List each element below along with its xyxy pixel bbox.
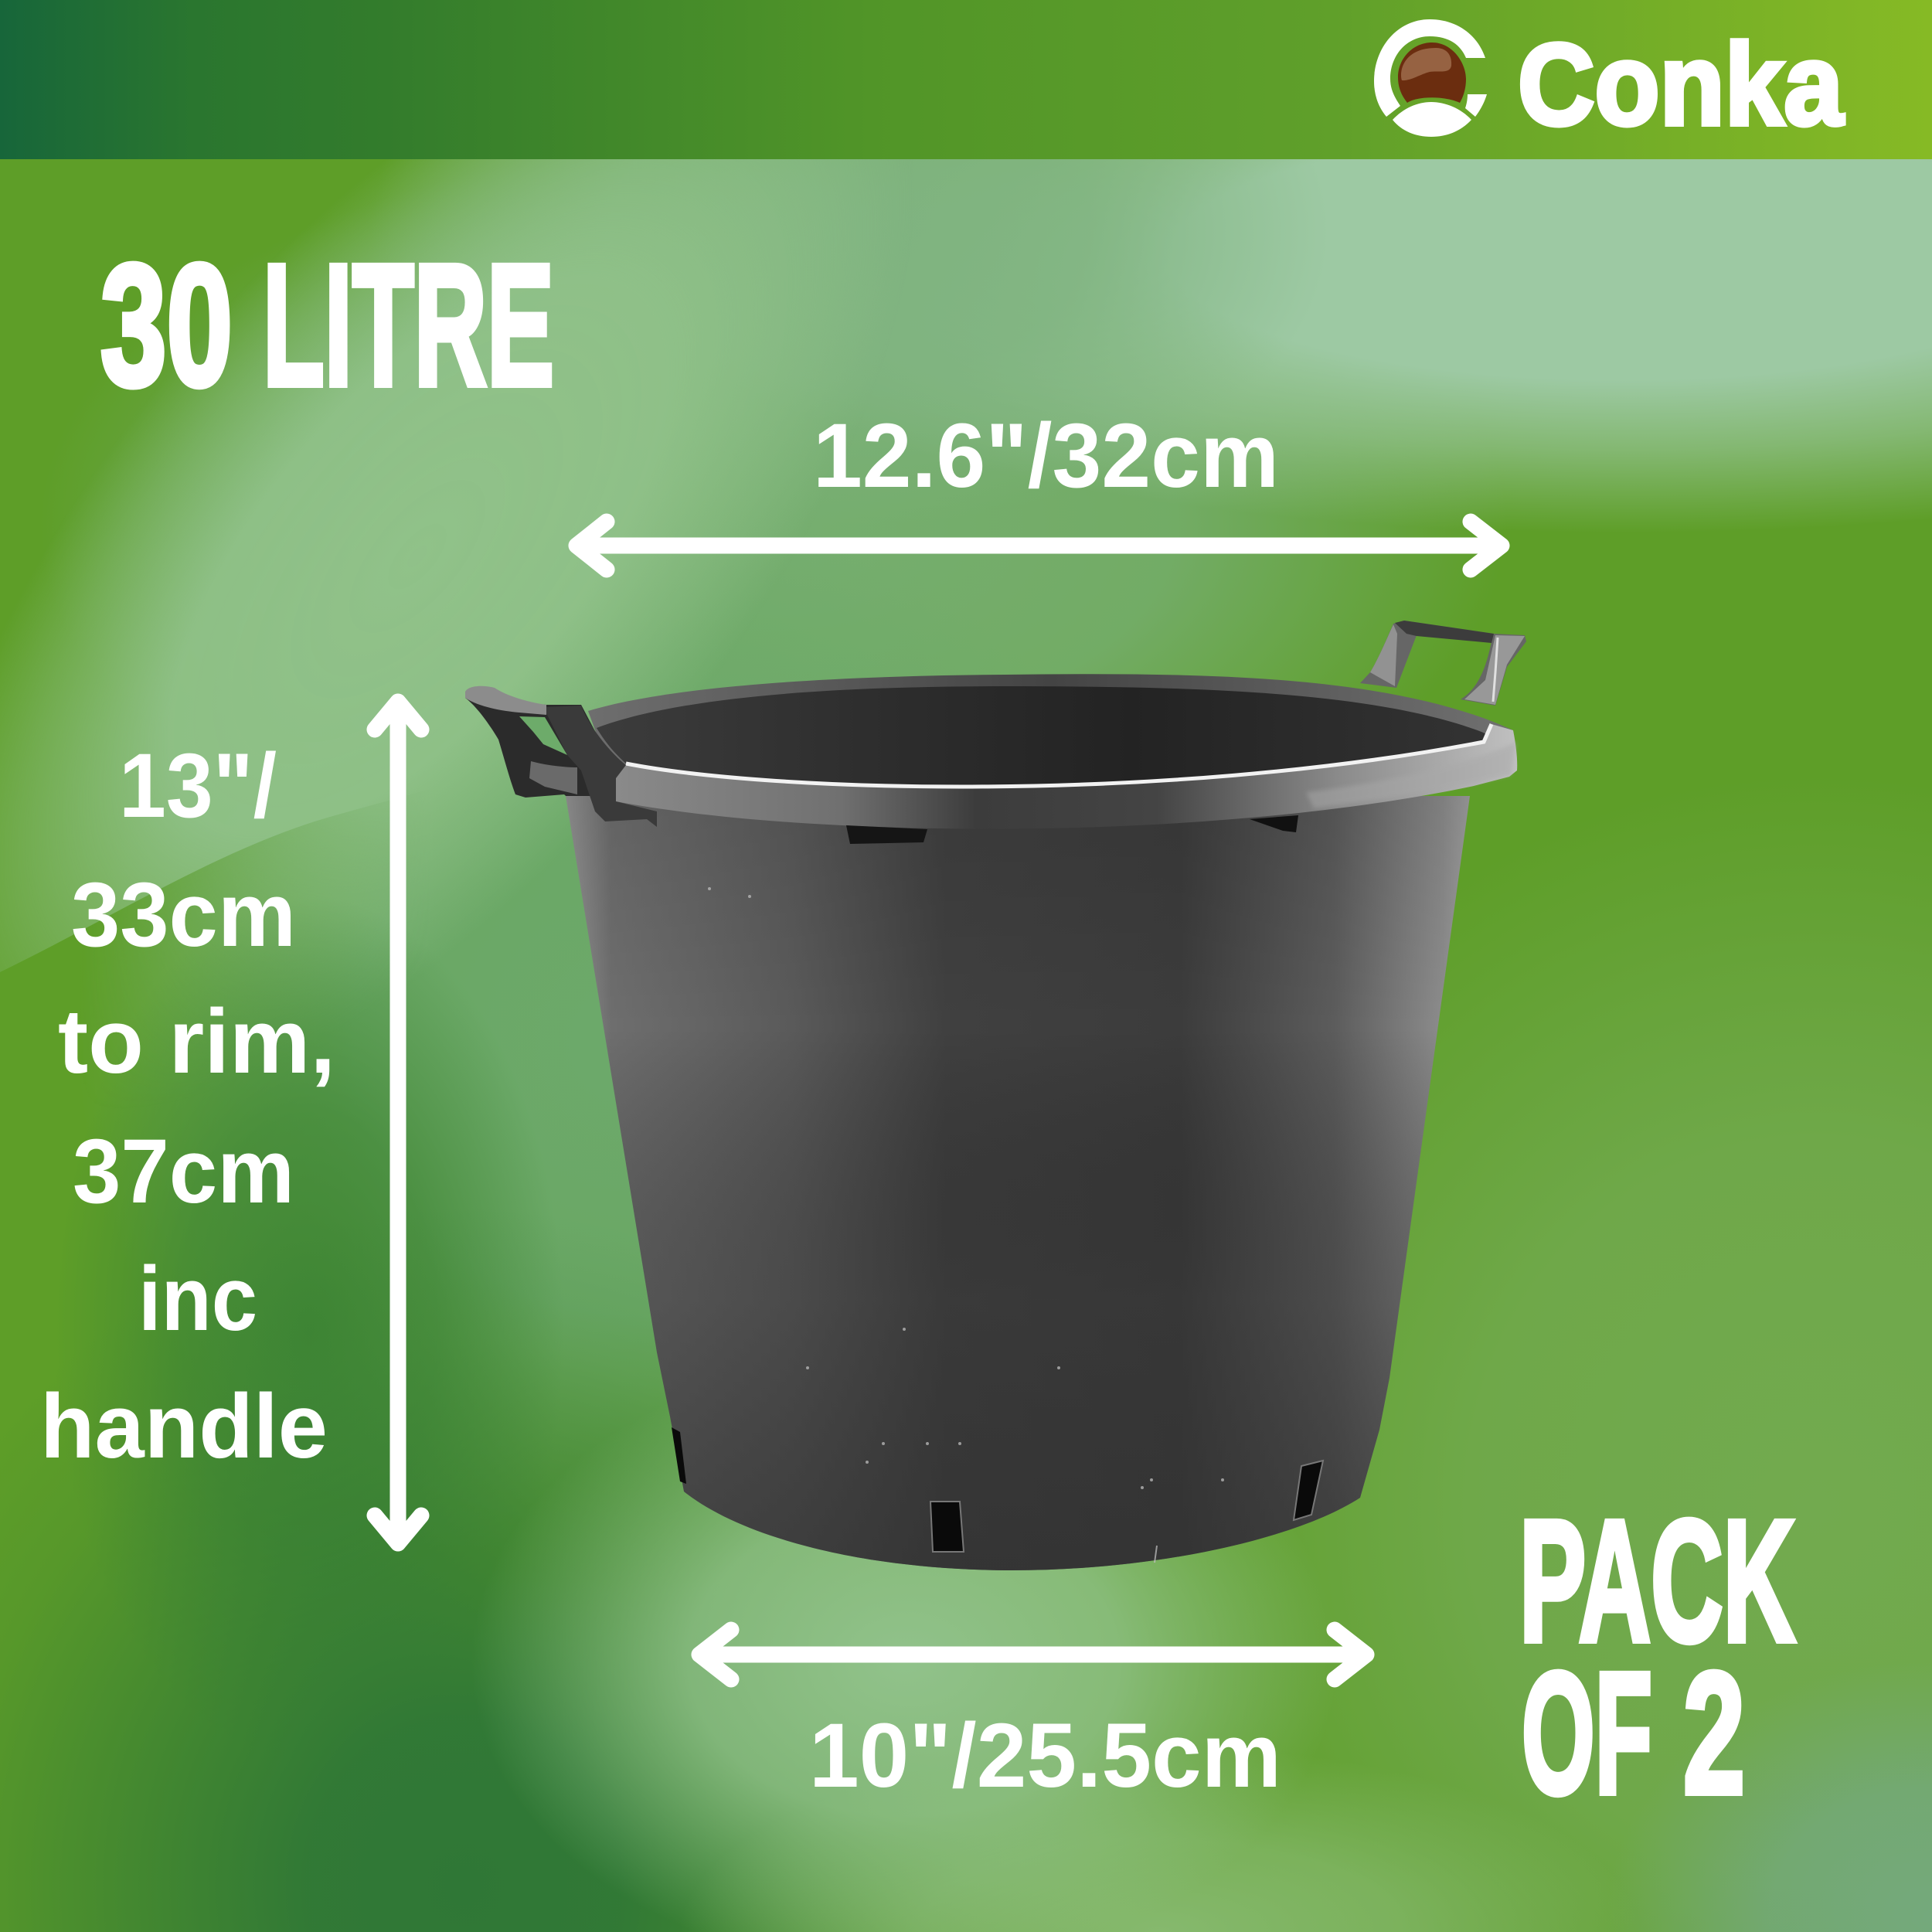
logo wordmark: Conka xyxy=(1518,19,1844,149)
surface specks xyxy=(708,887,1224,1563)
label: height: inc xyxy=(138,1248,257,1350)
label: pack of 2 xyxy=(1519,1485,1795,1830)
logo icon xyxy=(1374,19,1487,137)
arrow: base width xyxy=(699,1630,1366,1679)
label: height: to rim, xyxy=(58,991,335,1093)
label: height: 37cm xyxy=(73,1121,294,1223)
front handle post xyxy=(546,706,657,827)
pot body xyxy=(566,796,1470,1570)
label: rim width: 12.6"/32cm xyxy=(813,405,1279,507)
header band xyxy=(0,0,1932,159)
label: height: handle xyxy=(40,1376,328,1478)
logo: Conka xyxy=(1374,19,1844,149)
arrow: rim width xyxy=(577,522,1502,570)
label: pack of 2: 2 xyxy=(1683,1637,1745,1830)
drainage slots xyxy=(672,1427,1323,1552)
label: pack of 2: OF xyxy=(1522,1637,1652,1830)
heading: 30 litre: 30 xyxy=(100,229,233,422)
left handle xyxy=(465,686,597,804)
right handle xyxy=(1360,621,1526,706)
rim back and interior xyxy=(588,674,1513,787)
arrow: height xyxy=(375,702,421,1543)
label: height: 13"/ xyxy=(119,735,277,837)
label: height xyxy=(40,735,335,1478)
heading: 30 litre xyxy=(100,229,554,422)
pot photo illustration xyxy=(465,621,1526,1570)
rim front xyxy=(616,724,1517,829)
rim shadow slots xyxy=(846,815,1298,844)
label: base width: 10"/25.5cm xyxy=(809,1705,1281,1807)
heading: 30 litre: LITRE xyxy=(263,229,554,422)
label: height: 33cm xyxy=(71,864,296,966)
